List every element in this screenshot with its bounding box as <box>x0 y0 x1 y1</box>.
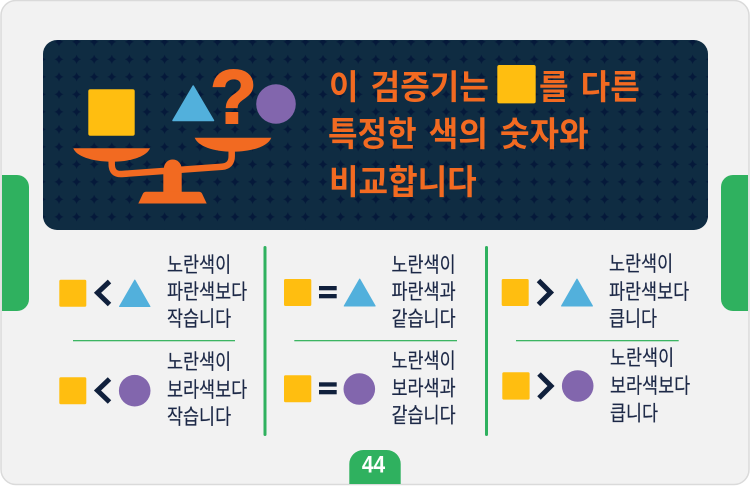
comparison: yellow greater than blue: 노란색이 <box>609 253 673 276</box>
icon: purple circle <box>256 84 296 124</box>
comparison: yellow greater than blue: 큽니다 <box>609 308 657 331</box>
comparison: yellow equals blue: 파란색과 <box>392 281 456 304</box>
comparison: yellow less than purple: 보라색보다 <box>167 379 247 402</box>
comparison: yellow equals purple <box>284 350 456 428</box>
comparison: yellow equals blue: 노란색이 <box>392 254 456 277</box>
comparison: yellow less than purple: 작습니다 <box>167 406 231 429</box>
comparison: yellow less than purple <box>59 351 247 429</box>
panel: equal <box>284 254 457 428</box>
comparison: yellow greater than purple: 큽니다 <box>610 402 658 426</box>
column divider right <box>485 246 488 436</box>
icon: blue triangle <box>173 86 214 120</box>
comparison: yellow equals blue: 같습니다 <box>392 308 456 331</box>
comparison: yellow greater than blue: 파란색보다 <box>609 281 689 304</box>
comparison: yellow less than purple: 노란색이 <box>167 351 231 374</box>
panel: less than <box>59 254 247 429</box>
icon: balance scale <box>73 138 271 204</box>
comparison: yellow equals purple: 같습니다 <box>392 404 456 428</box>
page number tab <box>349 450 401 484</box>
comparison: yellow less than blue: 노란색이 <box>167 254 231 277</box>
comparison: yellow less than blue: 파란색보다 <box>167 281 247 304</box>
icon: question mark: ? <box>210 55 257 140</box>
comparison: yellow greater than purple <box>502 347 690 426</box>
heading: 특정한 색의 숫자와 <box>328 116 589 154</box>
comparison: yellow equals purple: 노란색이 <box>392 350 456 373</box>
heading: 비교합니다 <box>329 164 477 202</box>
left green tab <box>2 175 29 311</box>
comparison: yellow equals blue <box>284 254 456 331</box>
comparison: yellow greater than blue <box>502 253 689 331</box>
page number tab: 44 <box>362 451 386 478</box>
comparison: yellow less than blue: 작습니다 <box>167 308 231 331</box>
column divider left <box>264 246 266 436</box>
comparison: yellow equals purple: 보라색과 <box>392 377 456 401</box>
comparison: yellow greater than purple: 보라색보다 <box>610 375 690 398</box>
panel: header <box>43 40 708 230</box>
panel: greater than <box>502 253 690 426</box>
heading: 를 다른 <box>539 69 640 107</box>
heading <box>328 65 640 202</box>
comparison: yellow less than blue <box>59 254 247 331</box>
icon: yellow square <box>88 89 135 136</box>
right green tab <box>721 175 748 311</box>
comparison: yellow greater than purple: 노란색이 <box>610 347 674 370</box>
heading: 이 검증기는 <box>329 69 489 107</box>
